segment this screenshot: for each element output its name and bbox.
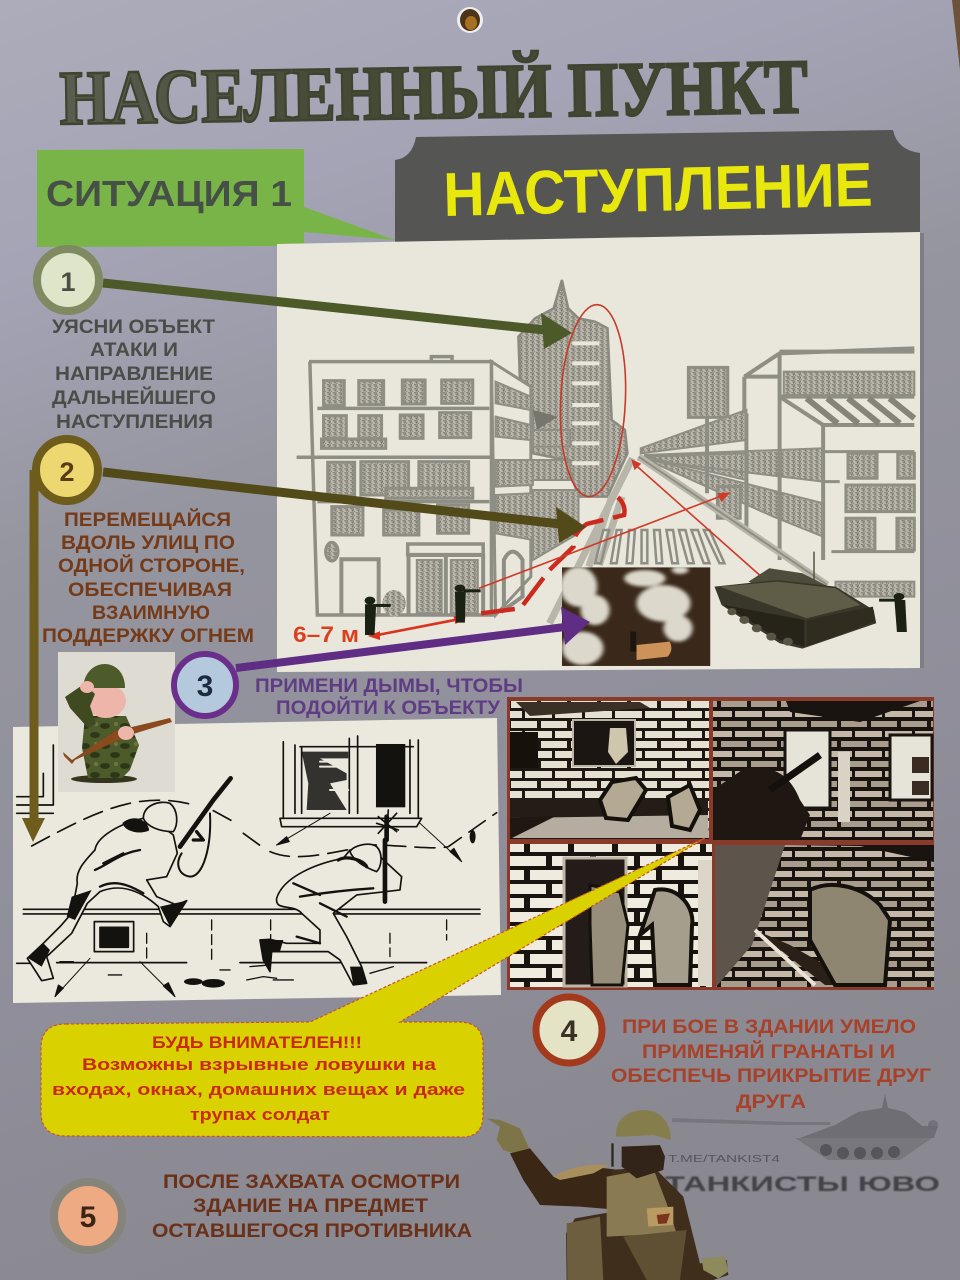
step 1 text: НАПРАВЛЕНИЕ <box>55 364 213 385</box>
crouching soldier <box>260 810 402 985</box>
soldier left <box>365 597 391 635</box>
bullet arcs <box>32 800 497 857</box>
watermark handle: T.ME/TANKIST4 <box>668 1153 780 1165</box>
step 1 badge: 1 <box>60 267 76 297</box>
watermark tank logo <box>672 1094 938 1160</box>
step 3 badge <box>174 654 236 716</box>
broken window <box>280 736 422 827</box>
step 4 text <box>611 1017 931 1113</box>
step 4 text: ПРИ БОЕ В ЗДАНИИ УМЕЛО <box>622 1017 916 1038</box>
cartoon soldier saluting <box>58 652 175 792</box>
rifle soldier running <box>27 778 231 981</box>
step 3 badge: 3 <box>197 670 213 703</box>
situation label: СИТУАЦИЯ 1 <box>46 173 292 214</box>
photo: window entry <box>510 701 709 839</box>
photo: doorway <box>510 844 712 987</box>
step 1 text: УЯСНИ ОБЪЕКТ <box>52 317 215 338</box>
step 5 text: ОСТАВШЕГОСЯ ПРОТИВНИКА <box>152 1221 472 1242</box>
photo: aiming from inside <box>713 701 933 840</box>
callout warning <box>41 838 705 1137</box>
heading text: НАСТУПЛЕНИЕ <box>443 151 873 230</box>
step 1 text: НАСТУПЛЕНИЯ <box>56 412 213 433</box>
step 4 badge <box>536 997 602 1063</box>
photo: stairwell <box>715 845 934 987</box>
footprints and debris <box>184 830 476 988</box>
arrow: step 1 <box>103 283 572 349</box>
left doorway <box>17 745 53 813</box>
step 2 text: ВЗАИМНУЮ <box>92 603 210 624</box>
step 5 text <box>152 1172 472 1242</box>
arrow: step 3 <box>236 607 590 668</box>
callout text: трупах солдат <box>190 1105 330 1124</box>
spacing arrow <box>369 617 464 639</box>
step 3 text <box>255 676 523 719</box>
step 1 badge <box>37 249 99 311</box>
step 4 text: ПРИМЕНЯЙ ГРАНАТЫ И <box>642 1041 895 1063</box>
step 4 text: ОБЕСПЕЧЬ ПРИКРЫТИЕ ДРУГ <box>611 1066 931 1087</box>
step 5 text: ПОСЛЕ ЗАХВАТА ОСМОТРИ <box>163 1172 460 1193</box>
fire direction arrows <box>479 461 765 588</box>
mounting hole <box>457 7 483 33</box>
step 2 text: ОБЕСПЕЧИВАЯ <box>68 580 232 601</box>
heading plaque <box>395 130 920 245</box>
panel: running soldiers illustration <box>13 718 501 1003</box>
callout text: входах, окнах, домашних вещах и даже <box>52 1080 465 1099</box>
step 2 text: ПЕРЕМЕЩАЙСЯ <box>64 509 231 531</box>
step 5 badge <box>54 1182 122 1250</box>
ground lines <box>17 909 480 963</box>
soldier right <box>879 593 907 632</box>
situation tag <box>37 149 395 247</box>
smoke photo <box>560 566 710 666</box>
title: НАСЕЛЕННЫЙ ПУНКТ <box>59 43 808 141</box>
step 1 text <box>52 317 216 433</box>
ricochet lines <box>55 813 462 997</box>
step 2 badge: 2 <box>59 457 75 487</box>
pointing soldier <box>487 1110 728 1280</box>
left building <box>297 357 579 617</box>
step 3 text: ПОДОЙТИ К ОБЪЕКТУ <box>276 697 500 719</box>
watermark title: ТАНКИСТЫ ЮВО <box>665 1173 940 1196</box>
tower <box>518 280 627 497</box>
panel: building assault photos <box>507 697 934 990</box>
step 4 badge: 4 <box>561 1015 578 1048</box>
step 1 text: АТАКИ И <box>90 340 178 361</box>
step 2 text: ПОДДЕРЖКУ ОГНЕМ <box>42 626 254 647</box>
arrow: step 2 <box>103 472 586 543</box>
arrow: vertical step 2 <box>22 470 45 842</box>
right buildings <box>549 348 914 623</box>
callout text: БУДЬ ВНИМАТЕЛЕН!!! <box>152 1033 362 1052</box>
distance label: 6–7 м <box>293 622 359 647</box>
basement window <box>94 922 134 952</box>
step 2 text: ВДОЛЬ УЛИЦ ПО <box>61 533 235 554</box>
step 3 text: ПРИМЕНИ ДЫМЫ, ЧТОБЫ <box>255 676 523 697</box>
step 1 text: ДАЛЬНЕЙШЕГО <box>52 387 216 409</box>
panel: street scene <box>277 232 924 672</box>
callout text <box>52 1033 465 1124</box>
soldier center <box>455 585 481 623</box>
target ellipse <box>557 304 630 497</box>
crosswalk <box>595 530 724 563</box>
step 2 text <box>42 509 254 647</box>
step 4 text: ДРУГА <box>736 1092 806 1113</box>
step 2 badge <box>36 439 98 501</box>
step 5 badge: 5 <box>80 1201 96 1234</box>
red dashed route <box>481 497 625 613</box>
step 2 text: ОДНОЙ СТОРОНЕ, <box>58 555 245 577</box>
step 5 text: ЗДАНИЕ НА ПРЕДМЕТ <box>193 1196 428 1217</box>
infantry fighting vehicle <box>715 552 876 649</box>
callout text: Возможны взрывные ловушки на <box>82 1055 437 1074</box>
